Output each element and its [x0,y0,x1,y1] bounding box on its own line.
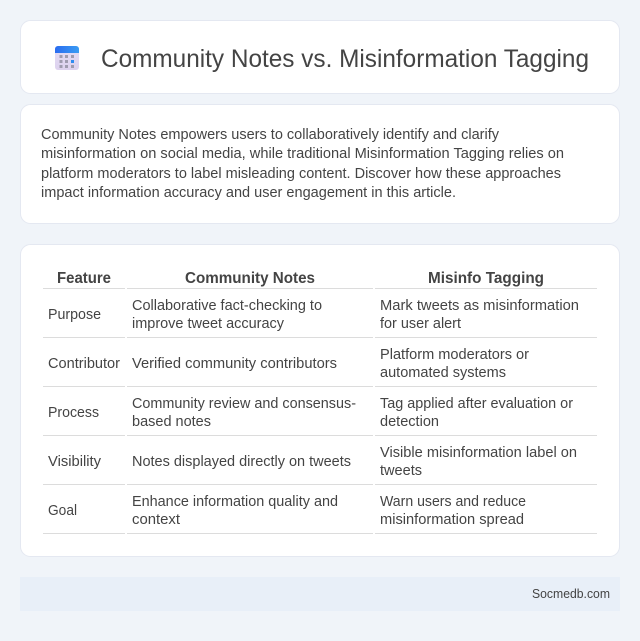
table row: goal: context [132,511,181,528]
table row: contributor: Verified community contributors [132,355,337,372]
table row: contributor: automated systems [380,364,506,381]
table row: contributor: Platform moderators or [380,346,529,363]
table row: goal [48,493,526,528]
table row: goal: Warn users and reduce [380,493,526,510]
table header: Community Notes [185,270,315,287]
footer bar [20,577,620,611]
text block: introduction [41,126,564,201]
table row: purpose [48,297,579,332]
icon: calendar [55,46,79,70]
table row: visibility: Notes displayed directly on tweets [132,453,351,470]
table header: Misinfo Tagging [428,270,544,287]
table row: process: Process [48,404,99,421]
table row: visibility [48,444,577,479]
table header [57,270,544,287]
table row: process: detection [380,413,439,430]
table row: goal: misinformation spread [380,511,524,528]
table row: process: Tag applied after evaluation or [380,395,573,412]
table row: purpose: Purpose [48,306,101,323]
text block: introduction: misinformation on social media, while traditional Misinformation Tagging relies on [41,145,564,162]
panel: title card [20,20,620,94]
table row: contributor: Contributor [48,355,120,372]
panel: introduction [20,104,620,224]
table row: purpose: Mark tweets as misinformation [380,297,579,314]
title: Community Notes vs. Misinformation Tagging [101,45,589,73]
table row: visibility: Visibility [48,453,101,470]
table row: contributor [48,346,529,381]
table row: purpose: improve tweet accuracy [132,315,284,332]
table row: process: Community review and consensus- [132,395,356,412]
table row: goal: Enhance information quality and [132,493,338,510]
table row: visibility: tweets [380,462,422,479]
table row: purpose: Collaborative fact-checking to [132,297,322,314]
table row: goal: Goal [48,502,77,519]
footer credit: Socmedb.com [532,586,610,601]
table row: visibility: Visible misinformation label on [380,444,577,461]
text block: introduction: impact information accuracy and user engagement in this article. [41,184,456,201]
table header: Feature [57,270,111,287]
panel: comparison table [20,244,620,556]
text block: introduction: Community Notes empowers users to collaboratively identify and clarify [41,126,499,143]
table row: process: based notes [132,413,211,430]
table row: purpose: for user alert [380,315,462,332]
text block: introduction: platform moderators to label misleading content. Discover how these approaches [41,165,561,182]
table row: process [48,395,573,430]
